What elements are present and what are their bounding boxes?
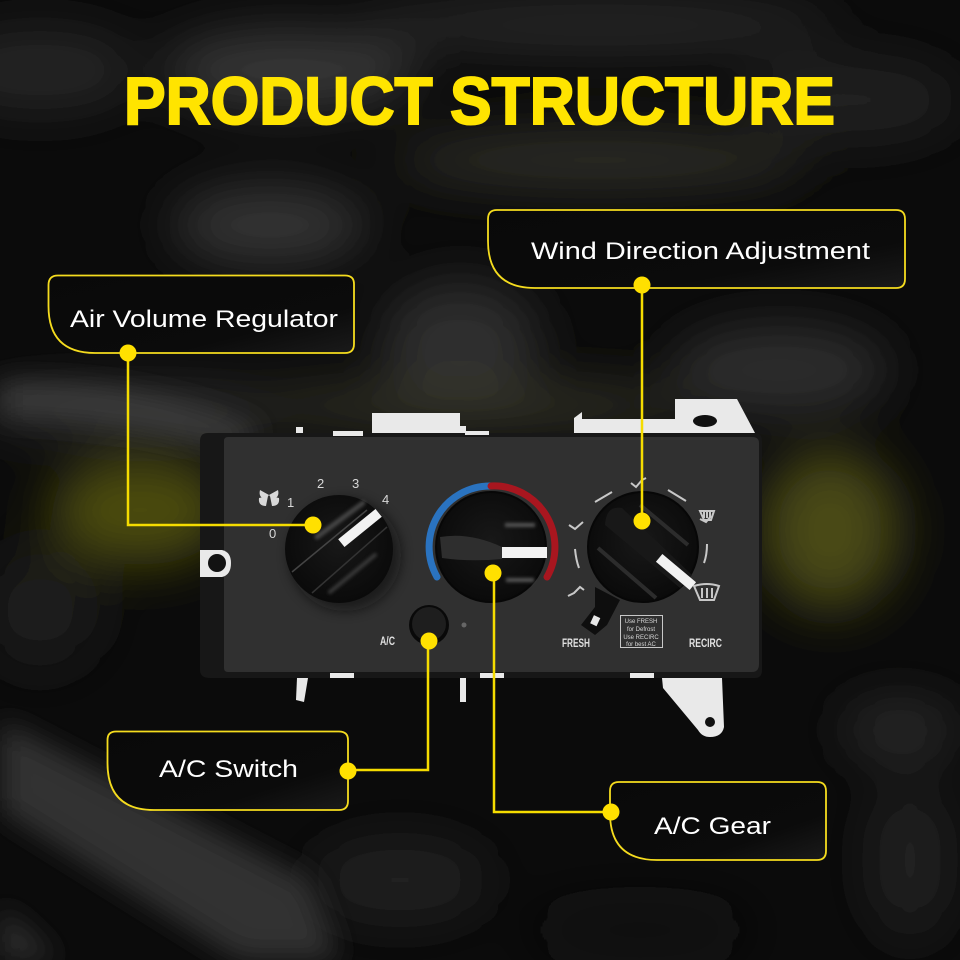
panel body: [200, 433, 762, 678]
label: Use FRESH box: Use FRESH: [625, 619, 657, 625]
callout: Air Volume Regulator: Air Volume Regulator: [70, 306, 338, 333]
callout: Wind Direction Adjustment: Wind Direction Adjustment: [531, 238, 870, 265]
labels: A/C, FRESH, RECIRC: A/C: [380, 634, 395, 648]
fan icon and scale: 3: [352, 476, 359, 491]
labels: A/C, FRESH, RECIRC: [380, 634, 722, 650]
product: climate control panel: [200, 399, 762, 737]
fan icon and scale: [259, 476, 389, 541]
connector: A/C Gear: [484, 564, 620, 820]
callout: A/C Gear: [610, 782, 826, 860]
connector: A/C Switch: [340, 632, 438, 780]
fan icon and scale: 4: [382, 492, 389, 507]
connector: Air Volume Regulator: [120, 344, 322, 534]
callout: Air Volume Regulator: [48, 276, 354, 353]
label: Use FRESH box: Use RECIRC: [623, 635, 659, 641]
fan icon and scale: 0: [269, 526, 276, 541]
A/C push button: [409, 605, 466, 645]
mounting tabs: [296, 399, 755, 737]
middle knob: A/C gear: [429, 486, 555, 602]
fan icon and scale: 1: [287, 495, 294, 510]
callout: A/C Gear: A/C Gear: [654, 813, 771, 840]
fan icon and scale: 2: [317, 476, 324, 491]
right knob: wind direction: [568, 478, 719, 635]
callout: A/C Switch: A/C Switch: [159, 756, 298, 783]
title: PRODUCT STRUCTURE: [124, 64, 835, 139]
left knob: air volume: [259, 476, 401, 611]
connector: Wind Direction Adjustment: [634, 276, 650, 530]
label: Use FRESH box: for Defrost: [627, 627, 655, 633]
label: Use FRESH box: for best AC: [626, 642, 657, 648]
labels: A/C, FRESH, RECIRC: RECIRC: [689, 636, 722, 650]
callout: A/C Switch: [108, 732, 348, 810]
label: Use FRESH box: [620, 616, 662, 648]
mounting hole tab: [200, 550, 231, 577]
mode scale and icons: [568, 478, 719, 600]
labels: A/C, FRESH, RECIRC: FRESH: [562, 636, 590, 650]
callout: Wind Direction Adjustment: [488, 210, 905, 288]
fresh/recirc lever: [581, 587, 620, 635]
